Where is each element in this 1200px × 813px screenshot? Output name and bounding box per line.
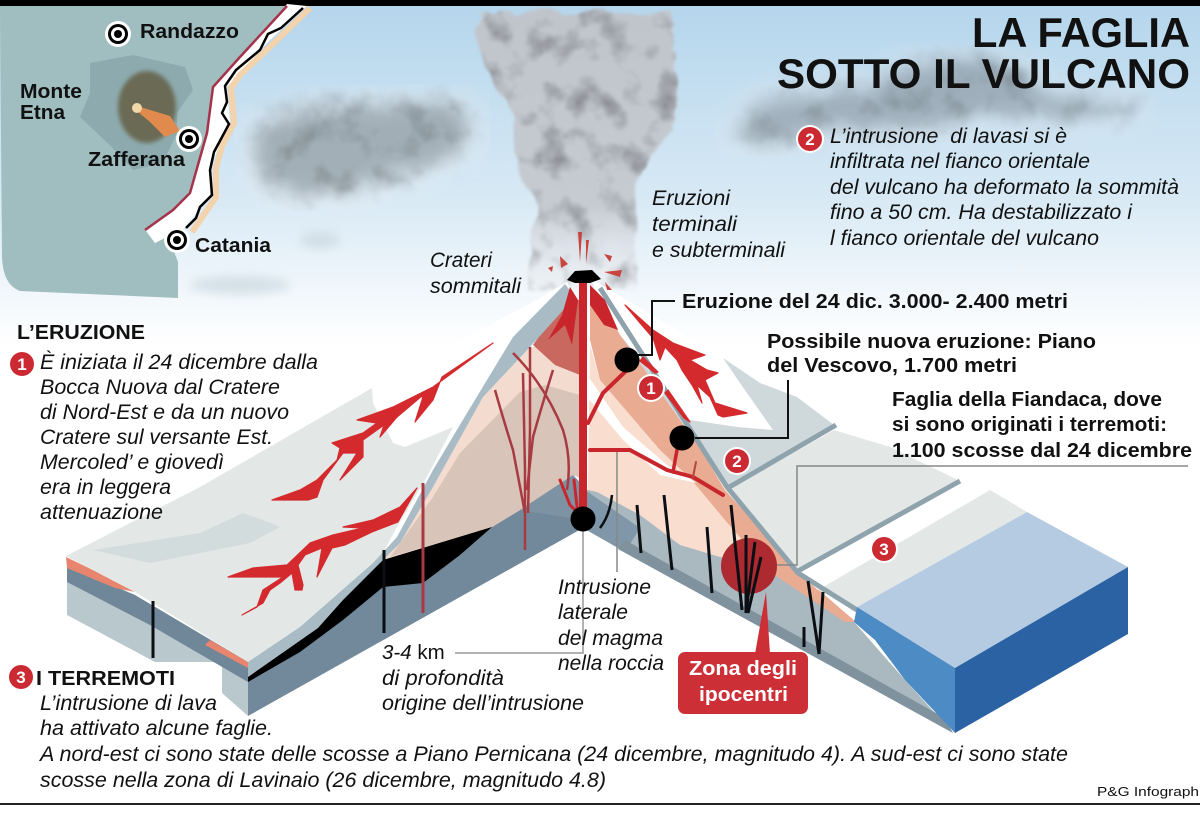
eruption spatter [548,232,622,290]
text block: intrusion note 2: L’intrusione di lavasi si è [830,125,1067,148]
label: profondita: 3-4 km [382,641,445,664]
label: intrusione laterale: nella roccia [558,652,664,675]
marker 1 on diagram [637,374,665,402]
surface shading patch [93,513,280,563]
text block: i terremoti: I TERREMOTI [36,667,175,690]
callout: zona degli ipocentri [678,592,808,714]
map labels: Zafferana [88,148,186,171]
crater [567,270,601,283]
label: profondita: origine dell’intrusione [382,692,584,715]
text block: i terremoti: L’intrusione di lava [40,692,217,715]
marker 1 on diagram: 1 [646,379,656,398]
label: crateri sommitali [430,249,522,298]
text block: l'eruzione [9,321,318,524]
map labels: Etna [20,101,66,124]
map labels: Monte [20,80,82,103]
text block: l'eruzione: era in leggera [40,476,171,499]
fault band lines [726,425,836,489]
left thin dark red intrusions [495,347,569,550]
bottom rule [0,803,1200,805]
cloud: left [245,93,480,202]
black fault zigzag [186,8,303,228]
third block surface [818,490,1027,607]
text block: intrusion note 2: l fianco orientale del vulcano [830,227,1099,250]
cloud: right [725,52,1145,150]
map labels: Randazzo [140,20,239,43]
lava flow: right slope [625,305,747,422]
label: profondita: di profondità [382,667,504,690]
right section salmon layer [590,290,856,622]
bold labels [682,290,1192,462]
bold labels: Possibile nuova eruzione: Piano [767,330,1096,353]
marker 2 on diagram [723,447,751,475]
dark red patch [533,300,580,375]
magma conduit [560,282,723,519]
text block: intrusion note 2 [796,125,1179,250]
text block: l'eruzione: È iniziata il 24 dicembre dalla [40,351,318,374]
text block: intrusion note 2: infiltrata nel fianco orientale [830,150,1090,173]
title [777,9,1190,97]
upper right snow [590,278,773,430]
map marker: Catania [164,227,190,253]
right cross-section basement [583,490,953,733]
volcano block diagram [66,232,1128,733]
label: eruzioni terminali: Eruzioni [652,187,731,210]
sea front face [955,567,1128,733]
left block surface [66,282,575,662]
leader lines [455,301,1188,653]
bold labels: del Vescovo, 1.700 metri [767,354,1017,377]
text block: intrusion note 2: fino a 50 cm. Ha destabilizzato i [830,201,1133,224]
text block: l'eruzione: di Nord-Est e da un nuovo [40,401,289,424]
Etna crater area [118,71,176,143]
right section light interior [588,345,745,560]
lava flow: left lower [228,488,417,615]
sea section [854,607,955,733]
text block: l'eruzione: attenuazione [40,501,163,524]
hypocentre zone [721,538,777,594]
label: crateri sommitali: sommitali [430,275,522,298]
text block: l'eruzione: L’ERUZIONE [17,321,145,344]
label: eruzioni terminali: e subterminali [652,239,786,262]
black dot: eruption point [614,348,640,372]
black layer wedge [248,527,492,682]
map land [0,6,287,298]
map crater [132,103,142,113]
left basement [520,475,587,520]
black dot: magma source [570,506,596,532]
title: LA FAGLIA [972,9,1190,56]
summit lava [548,285,618,345]
white gap strip [798,484,990,590]
callout: zona degli ipocentri: Zona degli [689,658,797,680]
title: SOTTO IL VULCANO [777,50,1190,97]
sea surface [857,512,1128,668]
text block: i terremoti: 3 [16,668,26,687]
red fault line on left section [422,483,424,613]
black dot: possible eruption [670,426,694,450]
beige fault band [192,8,310,232]
credit: P&G Infograph [1097,784,1199,799]
text block: l'eruzione: Bocca Nuova dal Cratere [40,376,280,399]
map labels: Catania [195,234,272,257]
coast white band [147,4,307,243]
text block: i terremoti [8,664,1068,792]
label: eruzioni terminali [652,187,786,262]
text block: intrusion note 2: del vulcano ha deformato la sommità [830,176,1179,199]
text block: i terremoti: ha attivato alcune faglie. [40,717,273,740]
bold labels: 1.100 scosse dal 24 dicembre [892,439,1192,462]
text block: l'eruzione: 1 [17,355,27,374]
label: intrusione laterale: del magma [558,627,663,650]
black fault lines [153,495,823,658]
map of Etna area [0,4,310,298]
right slope gray surface [620,335,834,487]
text block: i terremoti: A nord-est ci sono state delle scosse a Piano Pernicana (24 dicembre, magnitudo 4). A sud-est ci sono state [38,743,1068,766]
text block: i terremoti: scosse nella zona di Lavinaio (26 dicembre, magnitudo 4.8) [40,769,606,792]
text block: l'eruzione: Cratere sul versante Est. [40,426,273,449]
left section interior [383,345,580,560]
left block side face [67,580,248,716]
label: intrusione laterale: Intrusione [558,576,651,599]
label: eruzioni terminali: terminali [652,213,738,236]
eruption plume [477,12,675,288]
callout: zona degli ipocentri: ipocentri [699,684,788,706]
map marker: Randazzo [105,21,131,47]
map labels [20,20,272,257]
map marker: Zafferana [176,126,202,152]
left cross-section front face [248,475,587,716]
lava flow: left upper [272,343,493,500]
white rock streak [588,376,697,483]
label: intrusione laterale: laterale [558,601,628,624]
gray rim band [248,284,575,677]
sky background [0,0,1200,345]
text block: intrusion note 2: 2 [805,130,815,149]
bold labels: si sono originati i terremoti: [892,413,1167,436]
marker 2 on diagram: 2 [732,452,742,471]
marker 3 on diagram [870,535,898,563]
lava on map [137,106,180,137]
label: crateri sommitali: Crateri [430,249,493,272]
label: intrusione laterale [558,576,664,675]
red fault line [145,6,287,230]
label: profondita [382,641,584,715]
Etna outer zone [80,55,193,170]
marker 3 on diagram: 3 [879,540,889,559]
bold labels: Eruzione del 24 dic. 3.000- 2.400 metri [682,290,1068,313]
faint clouds [190,232,340,294]
second block surface [729,430,960,571]
bold labels: Faglia della Fiandaca, dove [892,388,1162,411]
text block: l'eruzione: Mercoled’ e giovedì [40,451,224,474]
top bar [0,0,1200,6]
